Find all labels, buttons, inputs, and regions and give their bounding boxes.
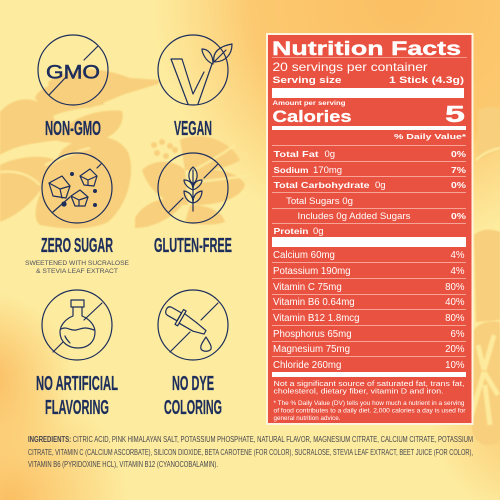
vitamin and mineral rows: 80% xyxy=(445,282,465,293)
daily value footnote: general nutrition advice. xyxy=(274,416,341,422)
label: zero sugar: ZERO SUGAR xyxy=(41,235,113,257)
vitamin and mineral rows: Vitamin B12 1.8mcg xyxy=(273,313,360,324)
vitamin and mineral rows: Phosphorus 65mg xyxy=(273,329,352,340)
main nutrient rows: 0g xyxy=(375,180,386,191)
main nutrient rows: Total Fat xyxy=(274,149,319,159)
main nutrient rows: Sodium xyxy=(274,165,309,175)
vitamin and mineral rows: 6% xyxy=(450,329,465,340)
label: no dye coloring: COLORING xyxy=(164,397,222,419)
label: no dye coloring xyxy=(164,373,222,419)
main nutrient rows: 0% xyxy=(451,180,467,190)
white separator xyxy=(272,372,466,377)
vitamin and mineral rows xyxy=(273,250,465,371)
icon: no artificial flavoring xyxy=(42,290,112,360)
sweetener note xyxy=(25,261,129,275)
nutrition heading: Nutrition Facts xyxy=(272,38,461,60)
label: no artificial flavoring: FLAVORING xyxy=(45,397,109,419)
servings information: 20 servings per container xyxy=(272,60,428,74)
main nutrient rows: 0g xyxy=(313,226,324,237)
left icons and labels xyxy=(25,35,232,419)
daily value footnote: * The % Daily Value (DV) tells you how much a nutrient in a serving xyxy=(274,401,464,407)
icon: non-GMO xyxy=(38,35,108,105)
vitamin and mineral rows: 80% xyxy=(445,313,465,324)
calories xyxy=(272,100,466,130)
servings information: 1 Stick (4.3g) xyxy=(389,75,464,86)
main nutrient rows: 0% xyxy=(451,149,467,159)
daily value footnote: of food contributes to a daily diet. 2,000 calories a day is used for xyxy=(274,408,466,414)
label: non-GMO: NON-GMO xyxy=(45,118,101,140)
white separator xyxy=(272,237,466,247)
icon: non-GMO: GMO xyxy=(46,62,100,84)
vitamin and mineral rows: Vitamin C 75mg xyxy=(273,282,342,293)
main nutrient rows xyxy=(274,149,467,237)
vitamin and mineral rows: 4% xyxy=(450,250,465,261)
daily value footnote xyxy=(274,401,466,422)
vitamin and mineral rows: Potassium 190mg xyxy=(273,266,351,277)
main nutrient rows: 0% xyxy=(451,211,467,221)
divider lines xyxy=(272,145,466,357)
hibiscus flowers background xyxy=(0,69,500,445)
not a significant source note: Not a significant source of saturated fat, trans fat, xyxy=(274,381,465,388)
main nutrient rows: Includes 0g Added Sugars xyxy=(298,211,411,222)
servings information xyxy=(272,60,464,98)
icon: gluten-free xyxy=(158,153,228,223)
label: no artificial flavoring: NO ARTIFICIAL xyxy=(36,373,118,395)
hibiscus light veins xyxy=(0,145,500,425)
icon: no dye coloring xyxy=(158,290,228,360)
main nutrient rows: Total Sugars 0g xyxy=(286,196,353,207)
vitamin and mineral rows: 40% xyxy=(445,297,465,308)
calories: Amount per serving xyxy=(272,100,346,107)
panel: nutrition facts xyxy=(267,34,472,424)
label: vegan: VEGAN xyxy=(174,118,212,140)
vitamin and mineral rows: Calcium 60mg xyxy=(273,250,335,261)
vitamin and mineral rows: 20% xyxy=(445,344,465,355)
label: no dye coloring: NO DYE xyxy=(172,373,214,395)
sweetener note: & STEVIA LEAF EXTRACT xyxy=(36,269,118,275)
servings information: Serving size xyxy=(272,75,342,86)
vitamin and mineral rows: 10% xyxy=(445,360,465,371)
not a significant source note: cholesterol, dietary fiber, vitamin D and iron. xyxy=(274,388,444,396)
label: gluten-free: GLUTEN-FREE xyxy=(154,235,232,257)
vitamin and mineral rows: Chloride 260mg xyxy=(273,360,341,371)
label: no artificial flavoring xyxy=(36,373,118,419)
daily value header: % Daily Value* xyxy=(394,134,466,141)
sweetener note: SWEETENED WITH SUCRALOSE xyxy=(25,261,129,267)
main nutrient rows: 0g xyxy=(324,149,335,160)
main nutrient rows: 170mg xyxy=(313,165,342,176)
calories: 5 xyxy=(445,101,465,127)
vitamin and mineral rows: 4% xyxy=(450,266,465,277)
vitamin and mineral rows: Vitamin B6 0.64mg xyxy=(273,297,355,308)
main nutrient rows: 7% xyxy=(451,165,467,175)
icon: vegan xyxy=(158,35,232,105)
main nutrient rows: Total Carbohydrate xyxy=(274,180,370,190)
icon: zero sugar xyxy=(42,153,112,223)
calories: Calories xyxy=(272,107,352,126)
ingredients text: VITAMIN B6 (PYRIDOXINE HCL), VITAMIN B12 (CYANOCOBALAMIN). xyxy=(28,460,218,469)
not a significant source note xyxy=(274,381,465,396)
vitamin and mineral rows: Magnesium 75mg xyxy=(273,344,350,355)
main nutrient rows: Protein xyxy=(274,226,308,236)
ingredients text xyxy=(28,435,473,469)
